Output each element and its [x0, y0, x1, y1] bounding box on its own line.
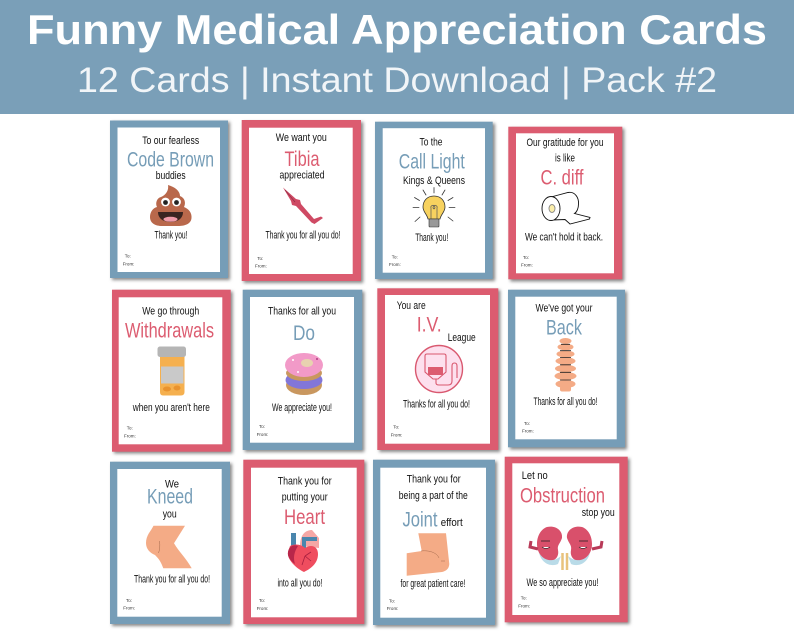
card headline: Code Brown: [127, 148, 214, 172]
card headline: Back: [546, 316, 582, 339]
icon: light bulb: [413, 188, 455, 227]
card text: we: We: [165, 478, 179, 490]
card: Heart: [243, 460, 366, 626]
card text: appreciated: appreciated: [280, 169, 324, 181]
card text: thanks: We so appreciate you!: [526, 577, 598, 589]
card text: into all you do: into all you do!: [278, 578, 322, 590]
icon: spine: [554, 338, 576, 392]
title: Funny Medical Appreciation Cards: [27, 6, 767, 53]
to and from lines: [257, 598, 268, 611]
icon: pill bottle: [158, 346, 186, 396]
card text: is like: is like: [555, 153, 575, 165]
to and from lines: To:: [392, 254, 398, 259]
card headline: Obstruction: [520, 485, 605, 508]
to and from lines: [522, 421, 534, 433]
to and from lines: To:: [523, 255, 529, 260]
card headline: Joint: [402, 509, 438, 532]
card text: thanks: Thank you for all you do!: [266, 229, 340, 241]
to and from lines: From:: [518, 603, 530, 608]
to and from lines: To:: [125, 254, 131, 259]
card text: greeting: To our fearless: [142, 135, 200, 147]
card text: thanks: We can't hold it back.: [525, 231, 603, 243]
card: C. diff: [508, 127, 624, 282]
card text: thanks: Thank you for all you do!: [134, 573, 210, 585]
card text: greeting: Our gratitude for you: [526, 137, 604, 149]
to and from lines: From:: [123, 606, 135, 611]
card: Obstruction: [505, 457, 630, 624]
card text: greeting: Thanks for all you: [268, 305, 336, 317]
to and from lines: [123, 598, 135, 611]
icon: bent knee: [146, 526, 192, 568]
card: Code Brown: [110, 120, 230, 280]
card: Tibia: [242, 120, 363, 283]
to and from lines: To:: [257, 256, 263, 261]
card headline: Heart: [284, 506, 325, 529]
card text: you are: You are: [397, 300, 426, 312]
card: I.V. League: [377, 288, 500, 452]
card headline: I.V.: [417, 314, 442, 337]
to and from lines: To:: [389, 599, 395, 604]
card text: thanks: Thank you!: [415, 232, 448, 244]
card text: you: you: [163, 508, 177, 520]
icon: IV bag: [416, 346, 462, 392]
card text: stop you: stop you: [582, 507, 615, 519]
icon: bent elbow: [407, 533, 449, 576]
to and from lines: To:: [524, 421, 530, 426]
card text: when you aren't here: when you aren't here: [132, 402, 210, 414]
card headline: Call Light: [399, 150, 465, 173]
to and from lines: To:: [259, 424, 265, 429]
to and from lines: [124, 426, 136, 438]
to and from lines: To:: [521, 596, 527, 601]
to and from lines: To:: [259, 598, 265, 603]
card headline: Withdrawals: [125, 320, 214, 343]
card text: thanks: Thank you!: [154, 229, 188, 241]
card text: putting your: putting your: [282, 492, 328, 504]
to and from lines: From:: [257, 432, 268, 437]
to and from lines: From:: [521, 263, 533, 268]
icon: poop emoji: [150, 185, 192, 226]
card headline: Kneed: [147, 485, 193, 508]
to and from lines: [389, 254, 401, 267]
card text: league: League: [448, 332, 476, 344]
to and from lines: [387, 599, 398, 611]
card text: thanks: Thanks for all you do!: [403, 399, 470, 411]
card: Kneed: [110, 462, 232, 626]
to and from lines: To:: [393, 424, 399, 429]
card: Do: [243, 290, 364, 452]
card text: thanks: for great patient care!: [400, 578, 466, 590]
to and from lines: [518, 596, 530, 608]
icon: toilet roll: [542, 192, 590, 224]
card: Withdrawals: [112, 290, 233, 454]
card text: greeting: We want you: [276, 132, 327, 144]
card headline: C. diff: [540, 166, 584, 189]
card: Back: [508, 290, 627, 450]
icon: anatomical heart: [288, 530, 319, 572]
header banner: [0, 0, 794, 114]
card headline: Tibia: [284, 148, 320, 171]
card text: thank you for: Thank you for: [278, 475, 332, 487]
to and from lines: From:: [387, 606, 398, 611]
card grid: [110, 120, 630, 627]
to and from lines: From:: [257, 606, 268, 611]
to and from lines: [257, 424, 268, 437]
to and from lines: To:: [126, 598, 132, 603]
to and from lines: From:: [255, 263, 267, 268]
to and from lines: [391, 424, 402, 438]
card text: greeting: We've got your: [536, 303, 593, 315]
card text: thank you for: Thank you for: [407, 473, 461, 485]
to and from lines: From:: [123, 262, 134, 267]
to and from lines: To:: [127, 426, 133, 431]
card: Joint: [373, 460, 497, 627]
card text: buddies: buddies: [156, 170, 186, 182]
to and from lines: From:: [124, 433, 136, 438]
to and from lines: [255, 256, 267, 268]
card text: greeting: To the: [420, 137, 442, 149]
card: Call Light: [375, 122, 495, 281]
card headline: Do: [293, 322, 315, 345]
to and from lines: [123, 254, 134, 267]
card text: effort: effort: [441, 517, 463, 529]
to and from lines: From:: [389, 262, 401, 267]
card text: kings and queens: Kings & Queens: [403, 175, 465, 187]
card text: thanks: Thanks for all you do!: [534, 396, 598, 408]
card text: let no: Let no: [522, 470, 548, 482]
subtitle: 12 Cards | Instant Download | Pack #2: [77, 61, 717, 100]
card text: greeting: We go through: [142, 305, 199, 317]
icon: flexing kidneys: [530, 527, 602, 570]
to and from lines: From:: [391, 433, 402, 438]
card text: thanks: We appreciate you!: [272, 402, 332, 414]
to and from lines: [521, 255, 533, 268]
to and from lines: From:: [522, 428, 534, 433]
icon: stacked donuts: [285, 353, 323, 395]
icon: tibia bone: [283, 188, 323, 224]
card text: being a part: being a part of the: [399, 490, 468, 502]
